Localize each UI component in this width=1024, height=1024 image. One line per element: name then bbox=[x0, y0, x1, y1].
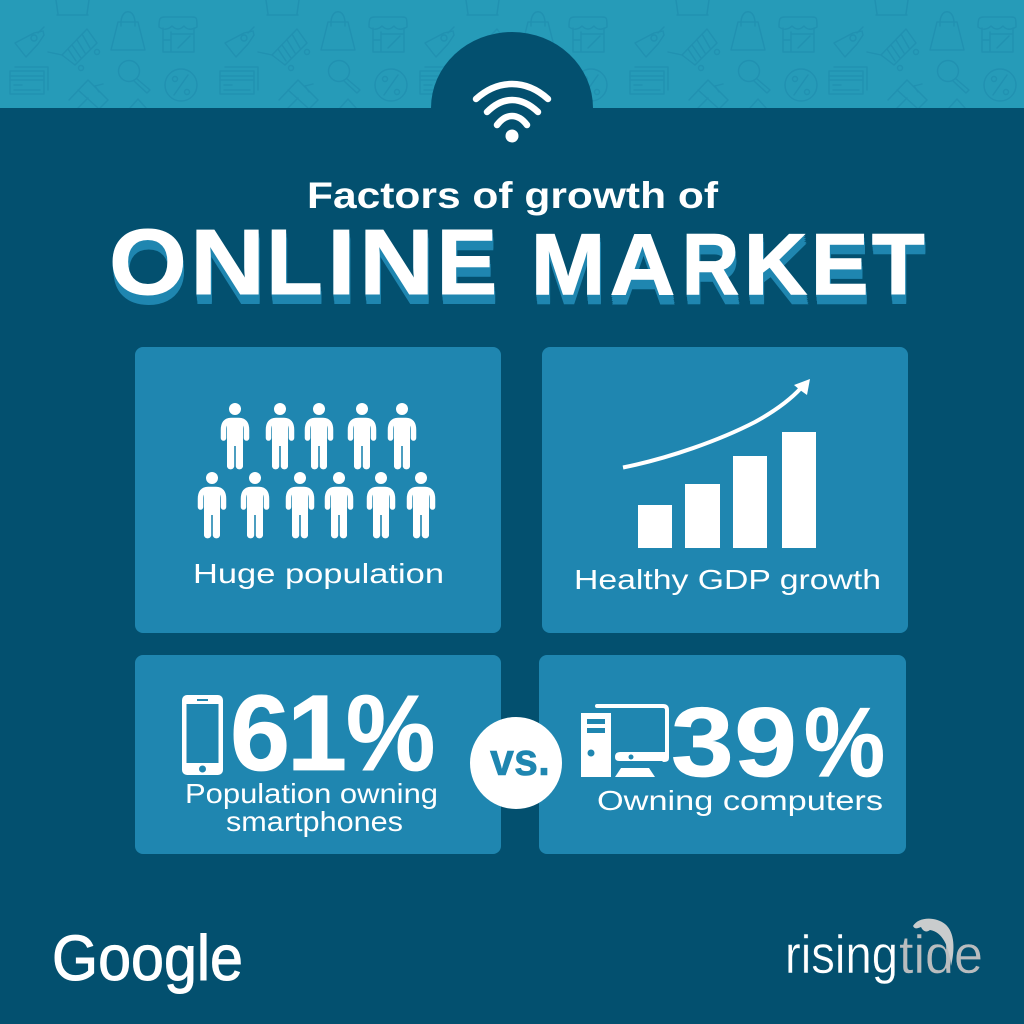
panel: computers bbox=[539, 655, 906, 854]
panel: GDP growth bbox=[542, 347, 908, 633]
stat: 39%: 39 bbox=[671, 688, 797, 797]
main heading with extruded shadow: E bbox=[811, 217, 868, 313]
main heading with extruded shadow: R bbox=[682, 216, 739, 313]
label: healthy GDP growth: Healthy GDP growth bbox=[574, 564, 881, 595]
main heading with extruded shadow: L bbox=[266, 210, 323, 314]
label: population owning smartphones: Population owning bbox=[185, 778, 438, 809]
main heading with extruded shadow: N bbox=[359, 210, 434, 314]
header band with shopping icon pattern bbox=[0, 0, 1024, 108]
stat: 39% bbox=[671, 688, 885, 798]
logo: risingtide bbox=[785, 919, 983, 985]
main heading with extruded shadow bbox=[109, 210, 925, 314]
logo: risingtide: tide bbox=[899, 925, 983, 985]
icon: smartphone bbox=[182, 695, 223, 775]
icon: desktop computer bbox=[581, 706, 667, 777]
main heading with extruded shadow: I bbox=[327, 210, 356, 314]
bar chart bbox=[638, 432, 816, 548]
stat: 39%: % bbox=[804, 688, 885, 798]
panel: smartphones bbox=[135, 655, 501, 854]
main heading with extruded shadow: E bbox=[436, 211, 497, 314]
icon: wifi bbox=[476, 84, 548, 142]
label: population owning smartphones bbox=[185, 778, 438, 837]
main heading with extruded shadow: A bbox=[610, 216, 675, 313]
logo: Google: Google bbox=[52, 922, 243, 994]
main heading with extruded shadow: T bbox=[872, 217, 925, 313]
vs badge: vs. bbox=[490, 734, 550, 785]
main heading with extruded shadow: N bbox=[190, 210, 265, 314]
main heading with extruded shadow: M bbox=[531, 216, 605, 313]
icon: crowd of people bbox=[200, 403, 432, 538]
main heading with extruded shadow: K bbox=[744, 217, 807, 313]
main heading with extruded shadow: O bbox=[109, 211, 187, 314]
panel: huge population bbox=[135, 347, 501, 633]
arrow: rising trend bbox=[623, 379, 810, 468]
dome behind wifi icon bbox=[431, 32, 593, 108]
icon: wave swoosh bbox=[913, 919, 953, 966]
stat: 61%: % bbox=[346, 674, 435, 794]
stat: 61%: 61 bbox=[230, 672, 347, 793]
label: population owning smartphones: smartphones bbox=[226, 806, 403, 837]
stat: 61% bbox=[230, 672, 435, 794]
vs badge bbox=[470, 717, 562, 809]
title line: Factors of growth of bbox=[307, 174, 719, 216]
label: huge population: Huge population bbox=[193, 558, 444, 589]
label: owning computers: Owning computers bbox=[597, 785, 883, 816]
logo: risingtide: rising bbox=[785, 925, 898, 985]
